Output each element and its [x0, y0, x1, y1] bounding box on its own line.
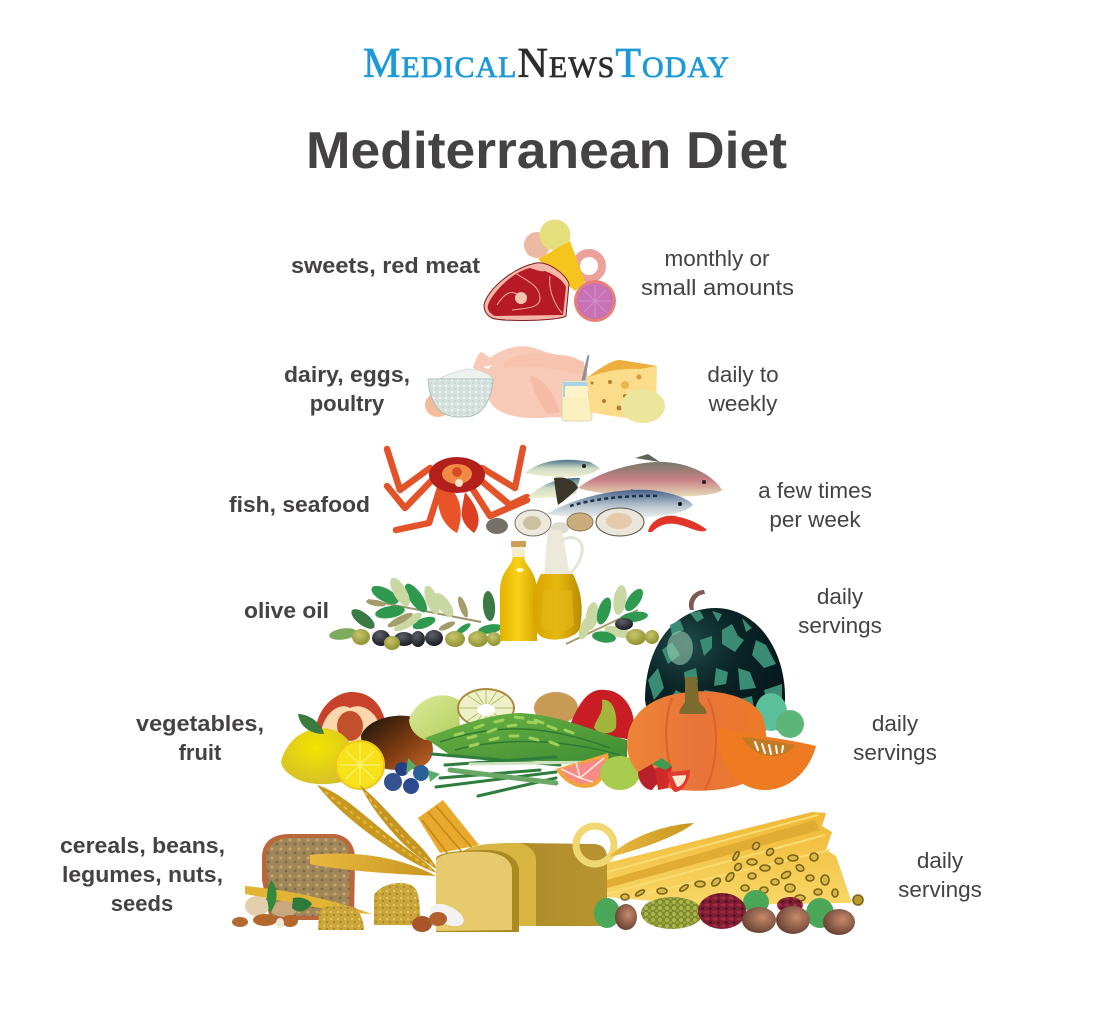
icon: large oyster [596, 508, 644, 536]
icon: green onions [432, 754, 600, 796]
icon: pink candy [574, 280, 616, 322]
illustration: dairy, eggs, poultry [425, 346, 665, 423]
icon: green lentils [641, 897, 703, 929]
icon: green apple [409, 695, 460, 740]
frequency: daily servings (vegetables): daily [872, 711, 919, 736]
label: dairy, eggs, poultry [284, 362, 410, 416]
icon: kiwi slice [457, 688, 515, 728]
icon: small fish [528, 478, 580, 498]
frequency: monthly or small amounts [641, 246, 794, 300]
label: cereals, beans, legumes, nuts, seeds: legumes, nuts, [62, 862, 223, 887]
icon: bowl of cottage cheese [428, 369, 494, 417]
frequency: daily servings (cereals): servings [898, 877, 982, 902]
frequency: daily servings (cereals): daily [917, 848, 964, 873]
label: dairy, eggs, poultry: poultry [310, 391, 385, 416]
icon: shrimp [648, 516, 707, 532]
label: cereals, beans, legumes, nuts, seeds: seeds [111, 891, 173, 916]
frequency: daily servings (cereals) [898, 848, 982, 902]
icon: donut [576, 253, 602, 279]
label: cereals, beans, legumes, nuts, seeds: cereals, beans, [60, 833, 225, 858]
icon: wheat low left [245, 886, 372, 914]
icon: peanuts and white nut [412, 899, 467, 932]
illustration: sweets and red meat [484, 220, 616, 322]
icon: strawberries [638, 758, 690, 792]
icon: nectarine half [316, 692, 386, 741]
frequency: daily servings (vegetables): servings [853, 740, 937, 765]
icon: wheat horizontal [310, 853, 436, 876]
icon: dark fin [554, 477, 578, 505]
icon: back of loaf [462, 843, 607, 926]
icon: almonds and nuts [232, 880, 312, 928]
icon: raw chicken [473, 346, 588, 418]
icon: watermelon [645, 590, 785, 730]
icon: seeds on spaghetti [621, 841, 863, 905]
illustration: fish and seafood [387, 448, 722, 536]
icon: spaghetti [607, 812, 852, 905]
icon: lemon slice [336, 741, 384, 789]
icon: ring pasta [576, 826, 614, 864]
icon: green cabbage sprouts [755, 693, 804, 738]
icon: blueberries [384, 758, 440, 794]
frequency: a few times per week: per week [769, 507, 861, 532]
frequency: monthly or small amounts: monthly or [664, 246, 770, 271]
icon: oil bottle [500, 541, 537, 641]
title: Mediterranean Diet [306, 122, 787, 180]
icon: lettuce [600, 756, 640, 790]
icon: pumpkin [627, 677, 766, 791]
label: vegetables, fruit: vegetables, [136, 711, 264, 736]
icon: crab [387, 448, 527, 533]
icon: small bread piece [374, 883, 420, 925]
icon: lemon [281, 728, 352, 784]
label: vegetables, fruit: fruit [179, 740, 222, 765]
illustration: vegetables and fruit [281, 590, 816, 796]
icon: dark apple [361, 716, 433, 770]
label: fish, seafood: fish, seafood [229, 492, 370, 517]
label: cereals, beans, legumes, nuts, seeds [60, 833, 225, 916]
icon: ice cream balls [524, 220, 570, 258]
illustration: cereals, beans, legumes, nuts, seeds [232, 785, 863, 935]
frequency: a few times per week: a few times [758, 478, 872, 503]
icon: egg yellow [621, 389, 665, 423]
icon: pasta bundle [418, 800, 479, 854]
label: vegetables, fruit [136, 711, 264, 765]
icon: red meat steak [484, 263, 569, 320]
label: dairy, eggs, poultry: dairy, eggs, [284, 362, 410, 387]
icon: oil jug [533, 530, 582, 640]
icon: asparagus [425, 713, 627, 761]
frequency: daily servings (olive oil) [798, 584, 882, 638]
logo: Medical News Today: MEDICALNEWSTODAY [363, 41, 729, 87]
icon: olives row [352, 629, 501, 650]
frequency: daily to weekly: daily to [707, 362, 779, 387]
icon: hazelnuts [615, 904, 855, 935]
icon: trout [578, 454, 722, 497]
illustration: olive oil [328, 530, 659, 650]
icon: wheat stalks top [317, 785, 438, 873]
icon: sardine [525, 460, 600, 477]
icon: shells [551, 513, 593, 534]
icon: grapefruit slice [556, 753, 609, 788]
frequency: daily servings (olive oil): servings [798, 613, 882, 638]
icon: left olive branch [328, 575, 503, 641]
frequency: daily to weekly: weekly [708, 391, 778, 416]
icon: cheese wedge [587, 360, 657, 418]
frequency: monthly or small amounts: small amounts [641, 275, 794, 300]
label: olive oil: olive oil [244, 598, 329, 623]
icon: mackerel [547, 489, 693, 518]
icon: loaf front slice [436, 850, 519, 932]
frequency: daily to weekly [707, 362, 779, 416]
frequency: a few times per week [758, 478, 872, 532]
frequency: daily servings (olive oil): daily [817, 584, 864, 609]
icon: lemon leaf [298, 714, 324, 734]
icon: oyster [515, 510, 551, 536]
icon: pumpkin slice [718, 727, 816, 790]
icon: brown bread slice [262, 834, 355, 920]
icon: small bread piece left [318, 904, 364, 930]
icon: potato [534, 692, 578, 724]
icon: clam [486, 518, 508, 534]
icon: ice cream cone [538, 241, 585, 291]
icon: wheat right [609, 823, 694, 857]
icon: jar with spoon [562, 355, 592, 421]
icon: red beans [698, 893, 803, 929]
label: sweets, red meat: sweets, red meat [291, 253, 481, 278]
icon: egg [425, 393, 451, 417]
icon: red pepper [570, 690, 634, 740]
icon: green leaves [594, 890, 834, 928]
frequency: daily servings (vegetables) [853, 711, 937, 765]
icon: right olive branch [566, 584, 659, 645]
